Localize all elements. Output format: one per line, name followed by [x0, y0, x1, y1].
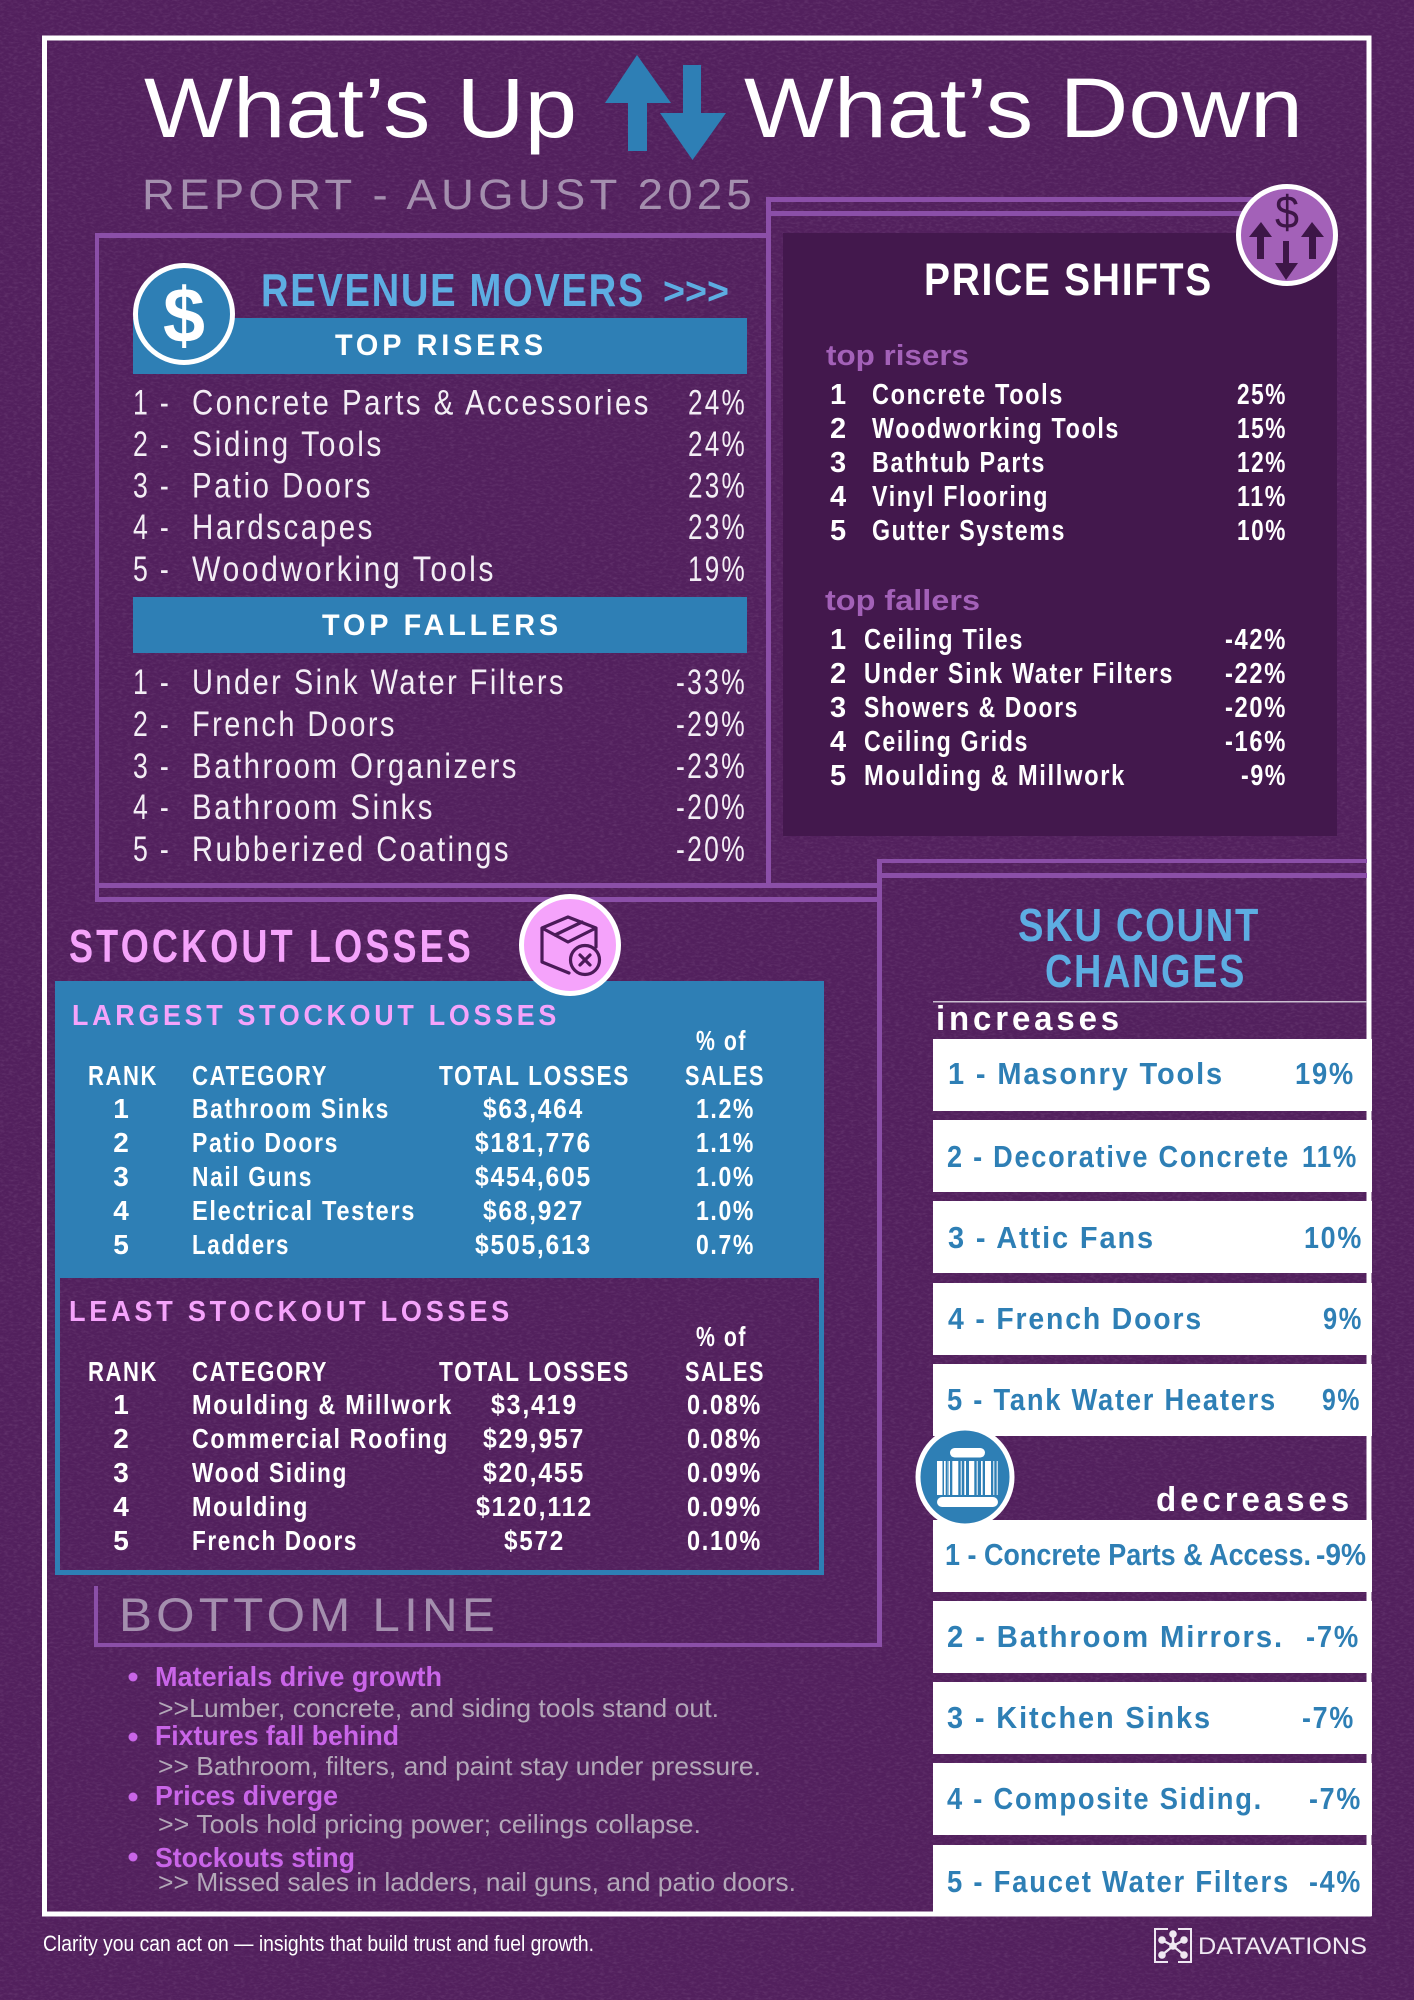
- increases rows: 1 - Masonry Tools: [948, 1056, 1224, 1091]
- price top risers list: Concrete Tools: [872, 379, 1064, 411]
- decreases rows: -9%: [1316, 1537, 1366, 1572]
- least stockout table: 2: [113, 1423, 131, 1454]
- least stockout table: $572: [504, 1525, 565, 1556]
- least stockout table: 5: [113, 1525, 131, 1556]
- increases rows: 2 - Decorative Concrete: [947, 1139, 1290, 1174]
- bullet: materials: Materials drive growth: [155, 1661, 442, 1692]
- decreases rows: 1 - Concrete Parts & Access.: [945, 1537, 1311, 1572]
- bullet: prices: [128, 1780, 701, 1839]
- largest stockout table: Nail Guns: [192, 1161, 313, 1192]
- decreases rows: -4%: [1309, 1864, 1362, 1899]
- price top risers list: 10%: [1237, 515, 1287, 547]
- least stockout table: $29,957: [483, 1423, 585, 1454]
- increases rows: 9%: [1322, 1382, 1361, 1417]
- icon: price shifts: $: [1275, 186, 1299, 238]
- revenue top risers list: Patio Doors: [192, 466, 373, 506]
- largest stockout table: 1: [113, 1093, 131, 1124]
- bullet: prices: >> Tools hold pricing power; ceilings collapse.: [158, 1809, 701, 1839]
- least stockout table: 0.09%: [687, 1457, 762, 1488]
- largest stockout table: [88, 1025, 765, 1260]
- least stockout table: Commercial Roofing: [192, 1423, 449, 1454]
- decreases rows: 4 - Composite Siding.: [947, 1781, 1263, 1816]
- panel frames: revenue, price, sku, stockout borders: [94, 197, 1367, 1647]
- increases rows: 5 - Tank Water Heaters: [947, 1382, 1277, 1417]
- increases rows: 11%: [1302, 1139, 1358, 1174]
- title: what's down: What’s Down: [744, 61, 1303, 155]
- least stockout table: 0.08%: [687, 1389, 762, 1420]
- bullet: materials: >>Lumber, concrete, and siding tools stand out.: [158, 1693, 719, 1723]
- largest stockout table: 4: [113, 1195, 131, 1226]
- largest stockout table: Patio Doors: [192, 1127, 339, 1158]
- revenue top fallers list: Under Sink Water Filters: [192, 663, 566, 702]
- revenue top risers list: Hardscapes: [192, 508, 375, 547]
- top fallers bar: TOP FALLERS: [322, 609, 562, 642]
- price top fallers list: 4: [830, 726, 848, 758]
- largest stockout table: 1.1%: [696, 1127, 755, 1158]
- price top fallers heading: top fallers: [825, 585, 980, 617]
- price top risers list: 15%: [1237, 413, 1287, 445]
- least stockout table: 0.09%: [687, 1491, 762, 1522]
- heading: bottom line: BOTTOM LINE: [119, 1588, 499, 1641]
- panel: sku count changes: [933, 899, 1372, 1916]
- revenue top risers list: [133, 384, 747, 589]
- revenue top fallers list: -20%: [676, 788, 747, 827]
- revenue top risers list: 23%: [688, 508, 747, 547]
- price top fallers list: 5: [830, 760, 848, 792]
- price top risers list: 12%: [1237, 447, 1287, 479]
- revenue top risers list: 5 -: [133, 550, 171, 589]
- heading: sku count changes: [1018, 899, 1260, 997]
- price top risers list: 11%: [1237, 481, 1287, 513]
- price top fallers list: Ceiling Tiles: [864, 624, 1024, 656]
- largest stockout table: 2: [113, 1127, 131, 1158]
- largest stockout table: $63,464: [483, 1093, 584, 1124]
- bullet: prices: Prices diverge: [155, 1780, 338, 1811]
- price top risers list: Woodworking Tools: [872, 413, 1120, 445]
- decreases rows: 2 - Bathroom Mirrors.: [947, 1619, 1284, 1654]
- revenue top risers list: 23%: [688, 466, 747, 506]
- largest stockout table: $68,927: [483, 1195, 584, 1226]
- least stockout table: % of: [696, 1321, 747, 1352]
- price top risers list: 4: [830, 481, 848, 513]
- title: what's up: What’s Up: [144, 61, 577, 155]
- icon: barcode: [918, 1428, 1012, 1526]
- bullet: fixtures: [128, 1720, 761, 1781]
- bottom line bullets: [128, 1661, 796, 1897]
- largest stockout table: $454,605: [475, 1161, 592, 1192]
- increases rows: 10%: [1304, 1220, 1363, 1255]
- title arrows icon: [605, 55, 726, 160]
- largest stockout table: Electrical Testers: [192, 1195, 416, 1226]
- increases rows: 9%: [1323, 1301, 1363, 1336]
- icon: dollar: $: [163, 271, 205, 359]
- revenue top fallers list: -29%: [676, 705, 747, 744]
- least stockout table: 1: [113, 1389, 131, 1420]
- largest stockout table: 0.7%: [696, 1229, 755, 1260]
- largest stockout table: 3: [113, 1161, 131, 1192]
- revenue top risers list: 4 -: [133, 508, 171, 547]
- least stockout table: RANK: [88, 1356, 158, 1387]
- revenue top risers list: Woodworking Tools: [192, 550, 496, 589]
- price top fallers list: -20%: [1225, 692, 1287, 724]
- largest stockout table: SALES: [685, 1060, 765, 1091]
- top risers bar: [133, 318, 747, 374]
- price top risers list: 25%: [1237, 379, 1287, 411]
- revenue top fallers list: 5 -: [133, 830, 171, 869]
- logo wordmark: DATAVATIONS: [1198, 1933, 1367, 1960]
- price top fallers list: 2: [830, 658, 848, 690]
- revenue top risers list: 19%: [688, 550, 747, 589]
- heading: sku count changes: SKU COUNT: [1018, 899, 1260, 951]
- bullet: fixtures: >> Bathroom, filters, and paint stay under pressure.: [158, 1751, 761, 1781]
- revenue top risers list: 3 -: [133, 466, 171, 506]
- least stockout table: $3,419: [491, 1389, 578, 1420]
- price top risers list: Bathtub Parts: [872, 447, 1046, 479]
- revenue top fallers list: 1 -: [133, 663, 171, 702]
- revenue top risers list: 1 -: [133, 384, 171, 422]
- panel: stockout tables: [55, 981, 824, 1575]
- price top risers list: 5: [830, 515, 848, 547]
- price top fallers list: Ceiling Grids: [864, 726, 1029, 758]
- decreases rows: -7%: [1309, 1781, 1362, 1816]
- bullet: materials: [128, 1661, 719, 1723]
- largest stockout table: Bathroom Sinks: [192, 1093, 390, 1124]
- decreases rows: -7%: [1302, 1700, 1355, 1735]
- least stockout table: 3: [113, 1457, 131, 1488]
- least stockout table: $120,112: [476, 1491, 593, 1522]
- heading chevrons: >>>: [663, 271, 729, 313]
- price top fallers list: Showers & Doors: [864, 692, 1079, 724]
- revenue top fallers list: -33%: [676, 663, 747, 702]
- report subtitle: REPORT - AUGUST 2025: [142, 171, 756, 219]
- increases rows: 4 - French Doors: [948, 1301, 1203, 1336]
- price top risers heading: top risers: [826, 340, 969, 372]
- bullet: stockouts: Stockouts sting: [155, 1842, 355, 1873]
- largest stockout table: $505,613: [475, 1229, 592, 1260]
- revenue top fallers list: Rubberized Coatings: [192, 830, 511, 869]
- icon: box with x: [522, 896, 618, 994]
- decreases rows: -7%: [1306, 1619, 1360, 1654]
- price top fallers list: Moulding & Millwork: [864, 760, 1126, 792]
- least stockout table: CATEGORY: [192, 1356, 328, 1387]
- price top fallers list: 3: [830, 692, 848, 724]
- price top fallers list: 1: [830, 624, 848, 656]
- decreases rows: 3 - Kitchen Sinks: [947, 1700, 1212, 1735]
- revenue top fallers list: -20%: [676, 830, 747, 869]
- revenue top risers list: 24%: [688, 384, 747, 422]
- least stockout table: Moulding & Millwork: [192, 1389, 453, 1420]
- revenue top fallers list: -23%: [676, 747, 747, 786]
- largest stockout table: 1.0%: [696, 1161, 755, 1192]
- heading: price shifts: PRICE SHIFTS: [924, 254, 1213, 305]
- largest stockout table: $181,776: [475, 1127, 592, 1158]
- revenue top risers list: 2 -: [133, 425, 171, 464]
- least stockout table: 0.10%: [687, 1525, 762, 1556]
- logo mark: [1155, 1929, 1191, 1962]
- decreases label: decreases: [1156, 1481, 1353, 1519]
- price top fallers list: [830, 624, 1287, 792]
- heading: revenue movers: REVENUE MOVERS: [261, 264, 645, 316]
- panel: revenue movers: [133, 264, 747, 869]
- revenue top fallers list: Bathroom Sinks: [192, 788, 435, 827]
- revenue top fallers list: [133, 663, 747, 869]
- least stockout table: $20,455: [483, 1457, 585, 1488]
- revenue top fallers list: 4 -: [133, 788, 171, 827]
- largest stockout heading: LARGEST STOCKOUT LOSSES: [72, 1000, 560, 1032]
- largest stockout table: 1.0%: [696, 1195, 755, 1226]
- price top fallers list: -16%: [1225, 726, 1287, 758]
- least stockout table: Moulding: [192, 1491, 309, 1522]
- least stockout table: Wood Siding: [192, 1457, 348, 1488]
- decreases rows: 5 - Faucet Water Filters: [947, 1864, 1290, 1899]
- largest stockout table: % of: [696, 1025, 747, 1056]
- panel: price shifts: [783, 233, 1337, 836]
- footer tagline: Clarity you can act on — insights that build trust and fuel growth.: [43, 1931, 594, 1956]
- heading: sku count changes: CHANGES: [1045, 945, 1246, 997]
- price top risers list: 1: [830, 379, 848, 411]
- largest stockout table: RANK: [88, 1060, 158, 1091]
- increases label: increases: [936, 1000, 1123, 1038]
- price top risers list: 3: [830, 447, 848, 479]
- icon: dollar: [136, 266, 232, 362]
- revenue top fallers list: 3 -: [133, 747, 171, 786]
- revenue top fallers list: 2 -: [133, 705, 171, 744]
- icon: price shifts: [1238, 186, 1336, 284]
- increases rows: 19%: [1295, 1056, 1355, 1091]
- revenue top fallers list: Bathroom Organizers: [192, 747, 519, 786]
- largest stockout table: CATEGORY: [192, 1060, 328, 1091]
- logo: datavations: [1155, 1929, 1367, 1962]
- bullet: fixtures: Fixtures fall behind: [155, 1720, 399, 1751]
- least stockout table: 0.08%: [687, 1423, 762, 1454]
- least stockout table: SALES: [685, 1356, 765, 1387]
- price top risers list: 2: [830, 413, 848, 445]
- bullet: stockouts: [128, 1842, 796, 1897]
- price top risers list: Vinyl Flooring: [872, 481, 1049, 513]
- revenue top fallers list: French Doors: [192, 705, 397, 744]
- heading: stockout losses: STOCKOUT LOSSES: [69, 920, 474, 972]
- price top fallers list: -42%: [1225, 624, 1287, 656]
- increases rows: [933, 1039, 1372, 1436]
- increases rows: 3 - Attic Fans: [948, 1220, 1155, 1255]
- top risers bar: TOP RISERS: [335, 329, 547, 362]
- decreases rows: [933, 1520, 1372, 1916]
- least stockout table: French Doors: [192, 1525, 358, 1556]
- revenue top risers list: Concrete Parts & Accessories: [192, 384, 651, 422]
- price top risers list: [830, 379, 1287, 547]
- revenue top risers list: Siding Tools: [192, 425, 384, 464]
- title: [144, 55, 1303, 160]
- largest stockout table: 1.2%: [696, 1093, 755, 1124]
- least stockout table: 4: [113, 1491, 131, 1522]
- price top risers list: Gutter Systems: [872, 515, 1066, 547]
- top fallers bar: [133, 597, 747, 653]
- largest stockout table: TOTAL LOSSES: [439, 1060, 630, 1091]
- bullet: stockouts: >> Missed sales in ladders, nail guns, and patio doors.: [158, 1867, 796, 1897]
- least stockout table: TOTAL LOSSES: [439, 1356, 630, 1387]
- largest stockout table: Ladders: [192, 1229, 290, 1260]
- least stockout table: [88, 1321, 765, 1556]
- revenue top risers list: 24%: [688, 425, 747, 464]
- largest stockout table: 5: [113, 1229, 131, 1260]
- least stockout heading: LEAST STOCKOUT LOSSES: [69, 1296, 513, 1328]
- price top fallers list: -22%: [1225, 658, 1287, 690]
- price top fallers list: -9%: [1241, 760, 1287, 792]
- price top fallers list: Under Sink Water Filters: [864, 658, 1174, 690]
